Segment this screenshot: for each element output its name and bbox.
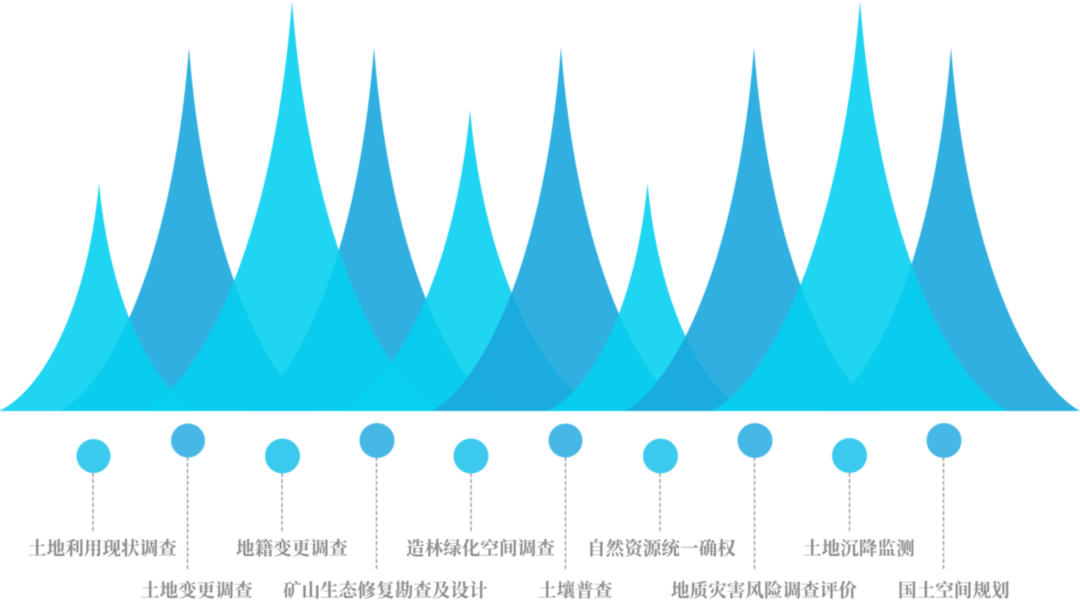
item: 土地变更调查 (141, 424, 253, 602)
peak: 国土空间规划 (822, 47, 1080, 411)
peak: 土壤普查 (432, 47, 690, 411)
peak: 地籍变更调查 (144, 1, 440, 411)
item: 土地沉降监测 (803, 438, 915, 560)
peak: 自然资源统一确权 (548, 183, 748, 411)
item: 土地利用现状调查: 土地利用现状调查 (28, 538, 177, 560)
peak: 土地变更调查 (60, 47, 318, 411)
item: 地籍变更调查 (236, 438, 348, 560)
item: 土壤普查: 土壤普查 (538, 581, 613, 602)
item: 土壤普查 (538, 424, 613, 602)
item: 土地变更调查: 土地变更调查 (141, 580, 253, 602)
item: 地质灾害风险调查评价 (671, 423, 857, 602)
item: 造林绿化空间调查: 造林绿化空间调查 (406, 538, 555, 560)
item: 地籍变更调查: 地籍变更调查 (236, 538, 348, 560)
peak: 土地利用现状调查 (0, 183, 199, 411)
peak: 土地沉降监测 (712, 1, 1008, 411)
item: 国土空间规划 (898, 423, 1010, 602)
peak: 矿山生态修复勘查及设计 (245, 47, 503, 411)
item: 土地沉降监测: 土地沉降监测 (803, 539, 915, 560)
peak: 造林绿化空间调查 (338, 110, 602, 411)
peak chart (0, 1, 1080, 411)
item: 造林绿化空间调查 (406, 438, 555, 560)
item: 矿山生态修复勘查及设计 (283, 423, 488, 602)
peak: 地质灾害风险调查评价 (625, 47, 883, 411)
item: 国土空间规划: 国土空间规划 (898, 580, 1010, 602)
item: 土地利用现状调查 (28, 439, 177, 560)
item: 矿山生态修复勘查及设计: 矿山生态修复勘查及设计 (283, 580, 488, 602)
item: 地质灾害风险调查评价: 地质灾害风险调查评价 (671, 580, 857, 602)
item: 自然资源统一确权: 自然资源统一确权 (587, 539, 736, 560)
item: 自然资源统一确权 (587, 438, 736, 560)
